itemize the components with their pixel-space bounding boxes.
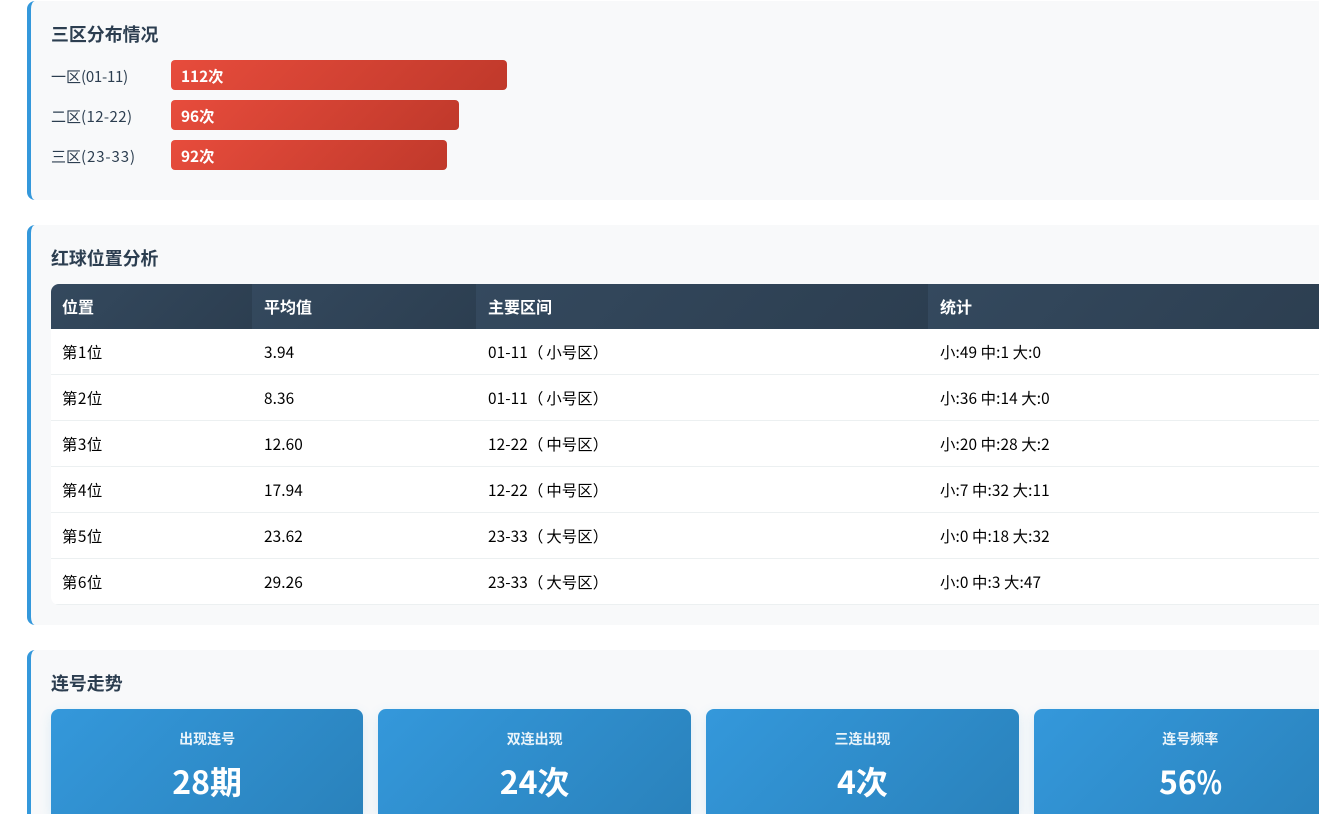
stat card: consecutive periods: 28期: [172, 758, 242, 804]
table: position statistics: 小:7 中:32 大:11: [940, 479, 1050, 501]
stat card: consecutive periods: [51, 709, 363, 814]
bar: zone 3: [171, 140, 447, 170]
stat card: consecutive periods: 出现连号: [179, 729, 235, 749]
table: position statistics: 位置: [62, 294, 94, 318]
table: position statistics: 小:49 中:1 大:0: [940, 341, 1041, 363]
bar: zone 1: 112次: [181, 65, 224, 87]
bar: zone 2: 96次: [181, 105, 214, 127]
heading: position analysis: 红球位置分析: [51, 245, 158, 271]
table: position statistics: 小:20 中:28 大:2: [940, 433, 1050, 455]
label: zone 2: 二区(12-22): [51, 106, 132, 127]
heading: zone distribution: 三区分布情况: [51, 21, 158, 47]
table: position statistics: 23-33（大号区）: [488, 571, 608, 593]
panel: zone distribution: [27, 1, 1319, 200]
table: position statistics: 12-22（中号区）: [488, 433, 608, 455]
stat card: double consecutive: [378, 709, 691, 814]
table: position statistics: 3.94: [264, 341, 294, 363]
table: position statistics: 01-11（小号区）: [488, 341, 608, 363]
table: position statistics: 平均值: [264, 294, 312, 318]
table: position statistics: 主要区间: [488, 294, 552, 318]
table: position statistics: 12-22（中号区）: [488, 479, 608, 501]
heading: consecutive trend: 连号走势: [51, 670, 123, 696]
stat card: triple consecutive: [706, 709, 1019, 814]
table: position statistics: 01-11（小号区）: [488, 387, 608, 409]
bar: zone 1: [171, 60, 507, 90]
bar: zone 3: 92次: [181, 145, 214, 167]
stat card: triple consecutive: 4次: [837, 758, 888, 804]
stat card: consecutive frequency: 连号频率: [1162, 729, 1218, 749]
table: position statistics: 小:0 中:18 大:32: [940, 525, 1050, 547]
label: zone 1: 一区(01-11): [51, 66, 128, 87]
table: position statistics: [51, 284, 1319, 605]
table: position statistics: 第3位: [62, 433, 103, 455]
stat card: double consecutive: 双连出现: [507, 729, 563, 749]
table: position statistics: 17.94: [264, 479, 303, 501]
table: position statistics: 23-33（大号区）: [488, 525, 608, 547]
panel: consecutive number trend: [27, 650, 1319, 814]
stat card: consecutive frequency: [1034, 709, 1319, 814]
stat card: consecutive frequency: %: [1197, 758, 1222, 804]
stat card: triple consecutive: 三连出现: [834, 729, 890, 749]
table: position statistics: 12.60: [264, 433, 303, 455]
table: position statistics: 第4位: [62, 479, 103, 501]
bar: zone 2: [171, 100, 459, 130]
table: position statistics: 23.62: [264, 525, 303, 547]
label: zone 3: 三区(23-33): [51, 146, 136, 167]
table: position statistics: 第1位: [62, 341, 103, 363]
stat card: consecutive frequency: 56: [1159, 758, 1197, 804]
table: position statistics: 第2位: [62, 387, 103, 409]
table: position statistics: 统计: [940, 294, 972, 318]
table: position statistics: 小:0 中:3 大:47: [940, 571, 1041, 593]
table: position statistics: 第6位: [62, 571, 103, 593]
table: position statistics: 8.36: [264, 387, 294, 409]
table: position statistics: 小:36 中:14 大:0: [940, 387, 1050, 409]
panel: red ball position analysis: [27, 225, 1319, 625]
table: position statistics: 29.26: [264, 571, 303, 593]
table: position statistics: 第5位: [62, 525, 103, 547]
stat card: double consecutive: 24次: [500, 758, 570, 804]
